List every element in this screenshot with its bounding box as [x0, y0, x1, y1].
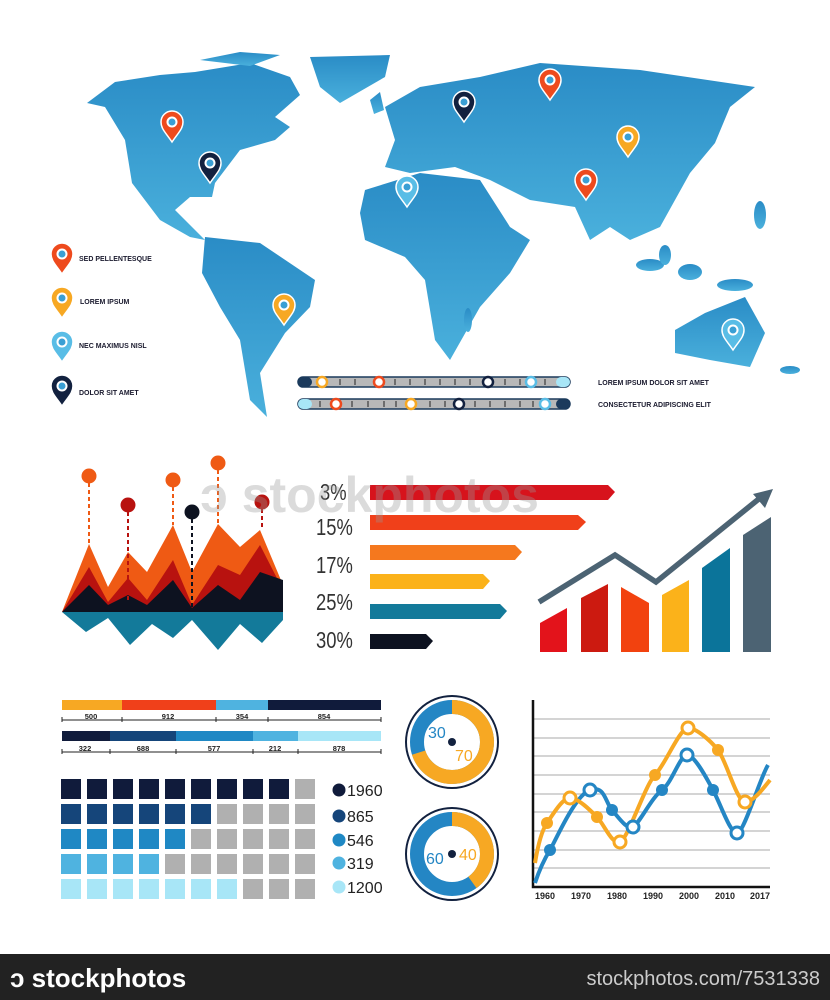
sliders — [298, 377, 712, 409]
growth bar chart — [539, 489, 773, 652]
donut 30/70: 30 — [428, 725, 446, 742]
percentage bar chart: 30% — [316, 628, 353, 654]
line chart — [533, 700, 770, 901]
footer banner: ↄ stockphotos — [10, 963, 186, 993]
stacked bars: 322 — [79, 744, 91, 753]
map legend: LOREM IPSUM — [80, 299, 130, 306]
map legend: SED PELLENTESQUE — [79, 256, 152, 263]
donut 60/40 — [406, 808, 498, 900]
donut 60/40: 60 — [426, 851, 444, 868]
waffle legend: 319 — [347, 856, 374, 873]
waffle legend: 546 — [347, 833, 374, 850]
sliders: LOREM IPSUM DOLOR SIT AMET — [598, 380, 710, 387]
percentage bar chart: 17% — [316, 553, 353, 579]
line chart: 1970 — [571, 891, 591, 901]
donut 30/70 — [406, 696, 498, 788]
footer banner — [0, 954, 830, 1000]
map legend — [51, 243, 152, 406]
line chart: 1960 — [535, 891, 555, 901]
stacked bars: 212 — [269, 744, 281, 753]
waffle legend: 1200 — [347, 880, 383, 897]
line chart: 2010 — [715, 891, 735, 901]
stacked bars: 688 — [137, 744, 149, 753]
footer banner: stockphotos.com/7531338 — [586, 968, 820, 990]
stacked bars: 854 — [318, 712, 331, 721]
percentage bar chart: 3% — [320, 480, 347, 506]
stacked bars: 912 — [162, 712, 174, 721]
map pins — [161, 69, 744, 350]
percentage bar chart — [316, 480, 615, 654]
map legend: DOLOR SIT AMET — [79, 390, 139, 397]
donut 30/70: 70 — [455, 748, 473, 765]
watermark: ↄ stockphotos — [200, 467, 539, 523]
waffle legend: 1960 — [347, 783, 383, 800]
stacked bars: 577 — [208, 744, 220, 753]
line chart: 1980 — [607, 891, 627, 901]
percentage bar chart: 15% — [316, 515, 353, 541]
stacked bars: 500 — [85, 712, 97, 721]
waffle legend — [332, 783, 383, 897]
stacked bars: 354 — [236, 712, 249, 721]
donut 60/40: 40 — [459, 847, 477, 864]
line chart: 1990 — [643, 891, 663, 901]
stacked bars: 878 — [333, 744, 345, 753]
percentage bar chart: 25% — [316, 590, 353, 616]
sliders: CONSECTETUR ADIPISCING ELIT — [598, 402, 712, 409]
area chart — [62, 456, 283, 650]
line chart: 2000 — [679, 891, 699, 901]
world map — [87, 52, 800, 417]
stacked bars — [62, 700, 381, 754]
line chart: 2017 — [750, 891, 770, 901]
map legend: NEC MAXIMUS NISL — [79, 343, 147, 350]
waffle chart — [61, 779, 315, 899]
waffle legend: 865 — [347, 809, 374, 826]
